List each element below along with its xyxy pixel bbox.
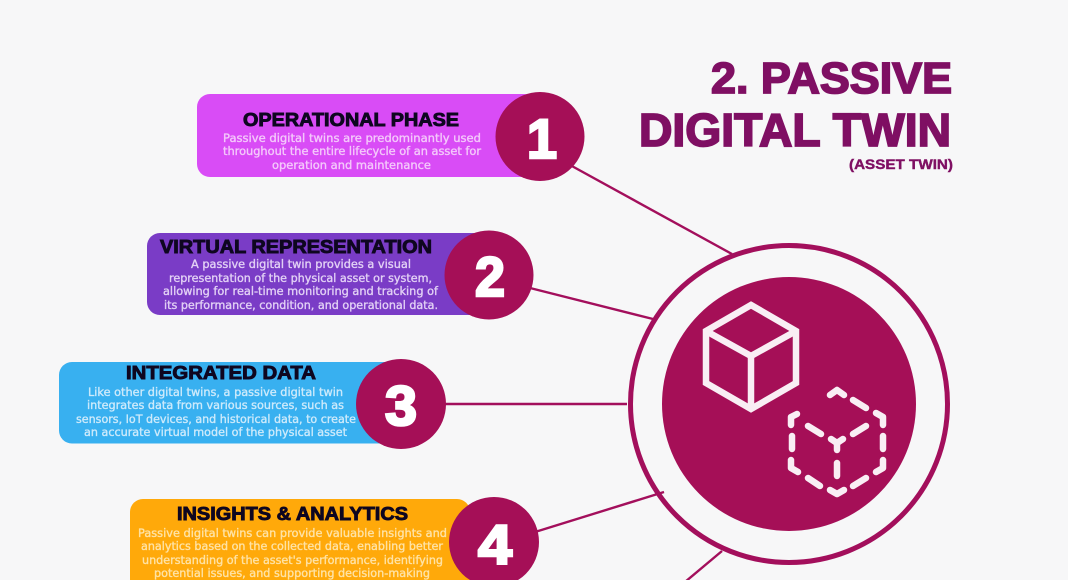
panel: insights and analytics	[130, 497, 539, 580]
heading: INTEGRATED DATA	[126, 362, 316, 383]
text block: representation of the physical asset or system,	[169, 271, 432, 285]
central circle	[630, 246, 948, 562]
number badge 3: 3	[385, 374, 417, 437]
text block: potential issues, and supporting decision-making	[154, 566, 430, 580]
text block: integrates data from various sources, such as	[87, 398, 344, 412]
text block: an accurate virtual model of the physical asset	[84, 425, 347, 439]
text block: operation and maintenance	[272, 158, 431, 172]
number badge 1	[496, 92, 584, 181]
heading: OPERATIONAL PHASE	[243, 109, 459, 130]
text block	[223, 131, 481, 172]
connector lines	[445, 165, 732, 580]
icon: solid cube	[706, 305, 796, 409]
number badge 4	[449, 497, 539, 580]
text block: sensors, IoT devices, and historical data, to create	[76, 412, 356, 426]
text block: allowing for real-time monitoring and tracking of	[163, 284, 439, 298]
text block: its performance, condition, and operational data.	[164, 298, 438, 312]
panel: virtual representation	[147, 230, 534, 320]
text block: Passive digital twins are predominantly used	[223, 131, 481, 145]
number badge 3	[356, 359, 446, 449]
text block	[163, 257, 439, 312]
text block: A passive digital twin provides a visual	[191, 257, 411, 271]
text block: understanding of the asset's performance, identifying	[142, 553, 443, 567]
heading: INSIGHTS & ANALYTICS	[177, 503, 408, 524]
outer ring	[630, 246, 948, 562]
title: (ASSET TWIN)	[849, 157, 953, 172]
icon: dashed cube	[791, 390, 883, 494]
text block	[138, 526, 447, 580]
title: 2. PASSIVE	[711, 54, 952, 103]
text block: Passive digital twins can provide valuable insights and	[138, 526, 447, 540]
panel: integrated data	[59, 359, 446, 449]
number badge 4: 4	[478, 513, 512, 576]
text block: analytics based on the collected data, enabling better	[141, 539, 443, 553]
title	[639, 54, 953, 172]
number badge 2: 2	[475, 245, 505, 308]
number badge 2	[444, 230, 534, 320]
text block: Like other digital twins, a passive digital twin	[88, 385, 343, 399]
number badge 1: 1	[527, 107, 557, 170]
text block: throughout the entire lifecycle of an asset for	[223, 144, 481, 158]
heading: VIRTUAL REPRESENTATION	[160, 236, 432, 257]
panel: operational phase	[197, 92, 584, 181]
text block	[76, 385, 356, 439]
inner disc	[662, 277, 916, 531]
title: DIGITAL TWIN	[639, 104, 951, 156]
